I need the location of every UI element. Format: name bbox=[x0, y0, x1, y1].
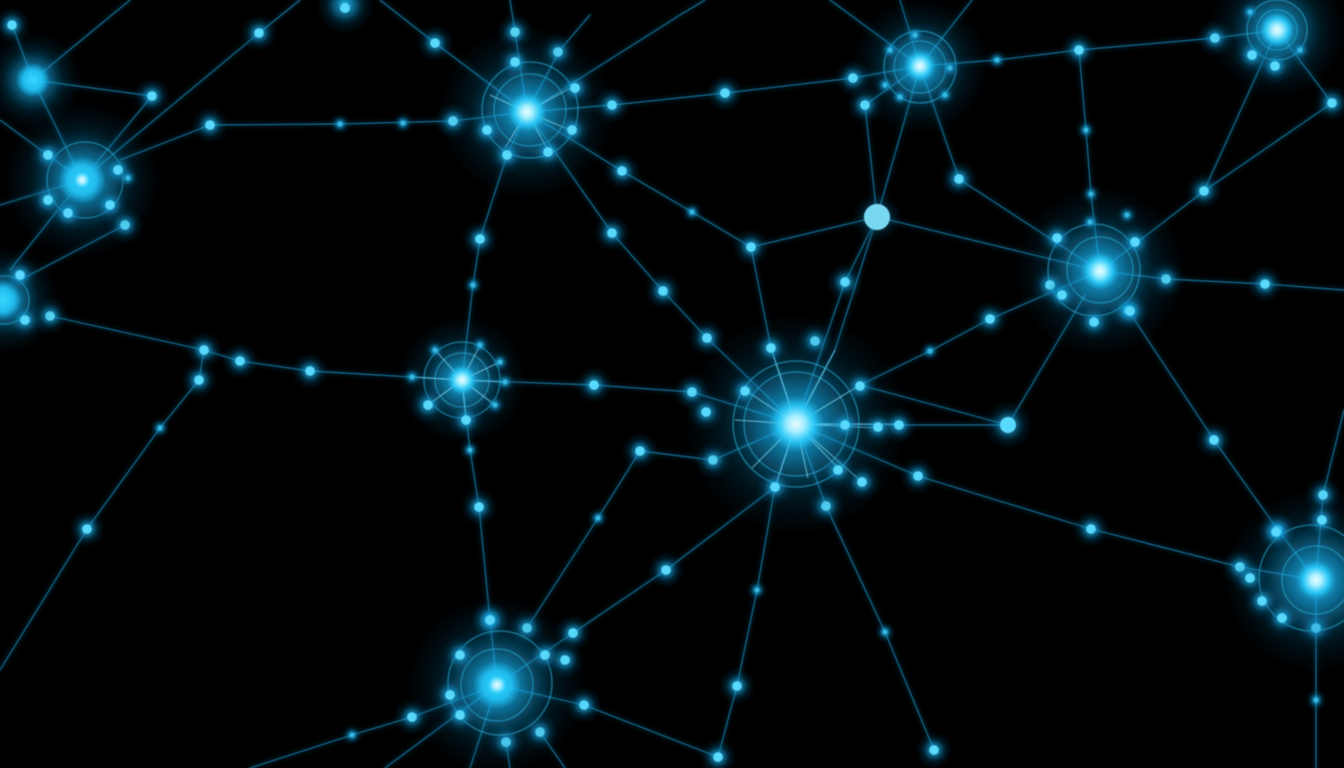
hub: left edge bbox=[0, 245, 60, 355]
hub: middle left bbox=[396, 314, 528, 446]
hub: bottom centre-left bbox=[405, 593, 589, 768]
hub: right bbox=[1012, 183, 1188, 359]
hub: central large node bbox=[681, 309, 918, 539]
hub: top left corner bbox=[0, 30, 83, 130]
hub: top right corner bbox=[1207, 0, 1344, 100]
hub: bottom right bbox=[1221, 485, 1344, 675]
hub: upper left bbox=[2, 100, 162, 260]
hub: top edge bbox=[315, 0, 375, 35]
hub: top centre-right bbox=[850, 0, 990, 136]
hub: top centre-left bbox=[437, 22, 617, 202]
